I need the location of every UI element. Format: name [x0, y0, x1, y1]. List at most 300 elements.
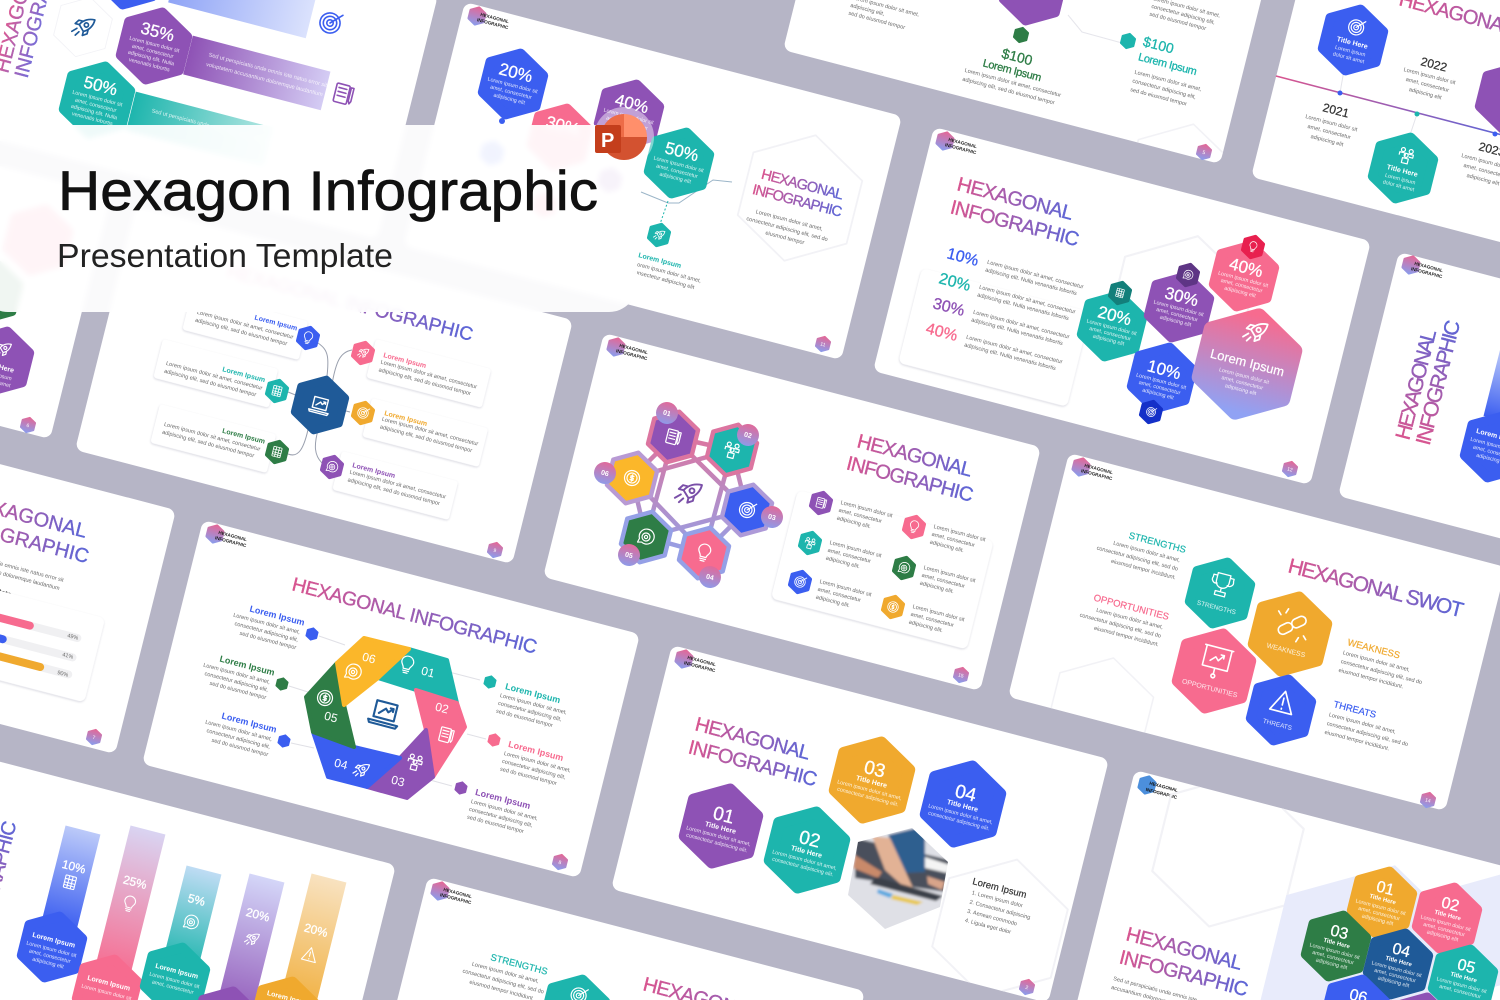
right label pink — [482, 733, 575, 790]
badge 02: 02 — [743, 432, 752, 440]
page number: 8 — [558, 860, 562, 866]
stat 30%: adipiscing elit. Nulla venenatis lobortis — [971, 317, 1064, 347]
page number: 9 — [493, 548, 497, 554]
logo: INFOGRAPHIC — [1145, 787, 1178, 800]
text: teal lorem ipsum: consectetur adipiscing elit — [631, 269, 695, 291]
hexagon: 40%: adipiscing elit — [1224, 285, 1257, 300]
value: green: Lorem ipsum dolor sit amet, consectetur — [964, 68, 1062, 99]
hexagon 05: 05 — [1456, 956, 1477, 977]
text: yellow: Lorem Ipsum — [384, 410, 428, 428]
logo — [607, 337, 651, 364]
text: strengths: eiusmod tempor incididunt. — [1110, 559, 1177, 581]
hexagon 01: 01 — [711, 803, 736, 829]
badge 01: 01 — [662, 410, 671, 418]
text: pink: Lorem Ipsum — [383, 352, 427, 370]
title: HEXAGONAL — [693, 714, 812, 765]
hexagon: 30%: amet, consectetur — [1156, 307, 1199, 324]
hexagon 01: 01 — [1375, 878, 1396, 899]
hexagon: threats — [1247, 673, 1315, 747]
faint hexagon with title: INFOGRAPHIC — [751, 182, 844, 221]
item: blue: amet, consectetur — [817, 587, 862, 604]
slide: top-left bands with percentages — [0, 0, 438, 239]
hexagon 02 — [1413, 881, 1481, 955]
list: Lorem Ipsum — [971, 876, 1028, 901]
logo: HEXAGONAL — [948, 137, 978, 149]
hexagon: teal title: dolor sit amet — [1382, 179, 1415, 194]
page number: 6 — [26, 423, 30, 429]
hexagon 01 — [1348, 865, 1416, 939]
hexagon 02: 02 — [1440, 894, 1461, 915]
hexagon: 35% — [117, 5, 191, 87]
hexagon: 40%: amet, consectetur — [605, 115, 648, 132]
page number — [815, 335, 831, 353]
slide: six steps around center — [75, 206, 573, 564]
step: purple — [320, 454, 344, 480]
hexagon 01 — [680, 781, 763, 871]
hexagon 03: 03 — [862, 757, 887, 783]
step: green — [265, 439, 289, 465]
stat 10%: 10% — [945, 245, 980, 270]
badge 06 — [592, 460, 618, 486]
page number: 14 — [1424, 797, 1431, 805]
right label pink: Lorem Ipsum — [507, 739, 564, 763]
page number — [953, 666, 969, 684]
bar: pink: 25% — [122, 872, 149, 892]
year 2022: Lorem ipsum dolor sit — [1403, 67, 1456, 87]
list: 4. Ligula eget dolor — [964, 918, 1012, 936]
item: teal: adipiscing elit. — [825, 556, 861, 570]
text: purple: Lorem Ipsum — [352, 462, 396, 480]
text: upper left: adipiscing elit, — [850, 3, 885, 18]
hexagon: 35%: adipiscing elit. Nulla — [127, 50, 175, 68]
title — [0, 488, 97, 568]
text: pink — [378, 352, 480, 398]
item: blue: adipiscing elit. — [815, 595, 851, 609]
right label teal: Lorem Ipsum — [504, 681, 561, 705]
faint hexagon — [932, 858, 1068, 992]
icon: PowerPoint — [594, 107, 654, 167]
big gradient hexagon: Lorem Ipsum — [1209, 346, 1286, 379]
title: INFOGRAPHIC — [844, 453, 975, 507]
right label purple — [449, 781, 542, 838]
hexagon: 50% — [645, 126, 713, 200]
dot 2 — [1414, 112, 1420, 116]
hexagon 01: Lorem ipsum dolor sit — [1355, 898, 1407, 917]
step: yellow — [351, 400, 375, 426]
hexagon 06 — [604, 447, 660, 509]
ring numbers: 06 — [361, 650, 377, 667]
text: upper left: sed do eiusmod tempor — [848, 11, 906, 31]
badge 04: 04 — [705, 574, 714, 582]
text: green: Lorem Ipsum — [221, 428, 266, 446]
hexagon: 10%: adipiscing elit — [1142, 387, 1175, 402]
hexagon 03: 03 — [1329, 922, 1350, 943]
hexagon 02: 02 — [797, 827, 822, 853]
badge 01 — [654, 400, 680, 426]
faint pink step icon — [533, 192, 557, 218]
hexagon 04: Title Here — [946, 799, 979, 814]
logo: HEXAGONAL — [1149, 781, 1179, 793]
card: blue — [182, 291, 308, 360]
page number — [86, 728, 102, 746]
faint hexagon with title: consectetur adipiscing elit, sed do — [746, 216, 828, 243]
purple band: Sed ut perspiciatis unde omnis iste natus error sit — [208, 52, 328, 89]
text: pink: Lorem ipsum dolor sit amet, consectetur — [380, 360, 478, 391]
text: threats: eiusmod tempor incididunt. — [1324, 730, 1390, 753]
text: yellow — [379, 410, 481, 455]
left label blue: Lorem ipsum dolor sit amet, — [232, 613, 301, 636]
item: pink: amet, consectetur — [931, 532, 976, 549]
left label blue 2: sed do eiusmod tempor — [211, 738, 269, 758]
item: pink: Lorem ipsum dolor sit — [933, 524, 986, 543]
hexagon: blue title: Lorem ipsum — [1334, 45, 1366, 59]
stat 10% — [945, 245, 1085, 298]
bar: blue: 10% — [60, 857, 87, 877]
hexagon: blue: Lorem ipsum dolor sit — [26, 940, 77, 959]
text: blue: adipiscing elit, sed do eiusmod tempor — [194, 318, 288, 347]
hexagon: 20%: amet, consectetur — [1089, 326, 1132, 343]
slide: dollar values — [784, 0, 1261, 162]
right label purple: consectetur adipiscing elit, — [468, 807, 534, 829]
ring numbers: 01 — [420, 664, 436, 681]
logo: INFOGRAPHIC — [616, 348, 648, 361]
text: upper right: consectetur adipiscing elit, — [1151, 4, 1216, 26]
card — [0, 555, 105, 702]
big gradient hexagon: adipiscing elit — [1224, 383, 1257, 397]
title — [844, 429, 981, 507]
hexagon: 20%: 20% — [497, 59, 535, 86]
left label green: consectetur adipiscing elit, — [204, 671, 269, 694]
title: HEXAGONAL SWOT — [1286, 555, 1466, 622]
slide: stats with hexagon cluster — [873, 127, 1371, 485]
item: purple: Lorem ipsum dolor sit — [840, 500, 893, 519]
text: pink: adipiscing elit, sed do eiusmod tempor — [378, 367, 471, 397]
icon: teal rocket hexagon — [647, 222, 671, 248]
text: strengths: Lorem ipsum dolor sit amet, — [471, 962, 540, 985]
hexagon 05: Lorem ipsum dolor sit — [1436, 976, 1488, 995]
vertical title: HEXAGONAL — [1392, 327, 1441, 442]
year 2021: 2021 — [1321, 100, 1351, 121]
hexagon: 35%: venenatis lobortis — [128, 57, 170, 74]
slide: numbered hexagons with photo — [611, 645, 1109, 1000]
item: purple: amet, consectetur — [838, 508, 883, 525]
year 2022: adipiscing elit — [1408, 87, 1442, 101]
bar: yellow — [275, 873, 346, 1000]
hexagon: 50% — [60, 59, 134, 141]
ring — [306, 638, 465, 798]
logo: HEXAGONAL — [443, 887, 473, 899]
banner title: Hexagon Infographic — [58, 159, 598, 222]
text: strengths — [1094, 523, 1187, 582]
right label purple: sed do eiusmod tempor — [466, 815, 524, 835]
text: strengths: STRENGTHS — [489, 952, 549, 978]
page number: 2 — [1025, 985, 1029, 991]
hexagon: opportunities: OPPORTUNITIES — [1181, 678, 1238, 700]
page number: 5 — [1202, 150, 1206, 156]
left label green: sed do eiusmod tempor — [209, 681, 267, 701]
title: HEXAGONAL INFOGRAPHIC — [225, 262, 475, 346]
badge 05 — [616, 542, 642, 568]
left label blue 2 — [201, 707, 292, 763]
hexagon: 30% — [528, 102, 592, 172]
stat 10%: adipiscing elit. Nulla venenatis lobortis — [985, 267, 1078, 297]
logo: HEXAGONAL — [218, 530, 248, 542]
logo — [431, 881, 475, 908]
text: threats — [1324, 699, 1414, 757]
logo — [1402, 255, 1446, 282]
card: pink — [366, 339, 491, 408]
icon: red — [1241, 234, 1265, 260]
item: yellow: Lorem ipsum dolor sit — [912, 604, 965, 623]
page number — [552, 853, 568, 871]
slide: vertical title right — [1338, 252, 1500, 610]
hexagon: blue: amet, consectetur — [28, 948, 71, 965]
text: blue — [194, 300, 298, 349]
hexagon: 50%: adipiscing elit. Nulla — [70, 104, 118, 122]
text: strengths: consectetur adipiscing elit, sed do — [1096, 546, 1178, 573]
item: yellow: amet, consectetur — [910, 612, 955, 629]
hexagon: 35%: 35% — [139, 18, 176, 45]
hexagon: pink — [73, 953, 141, 1000]
stat 40%: 40% — [924, 320, 959, 345]
stat 20% — [937, 270, 1077, 323]
title: INFOGRAPHIC — [948, 197, 1081, 251]
page number: 15 — [957, 672, 964, 680]
hexagon: 40% — [1210, 239, 1278, 313]
hexagon 03: amet, consectetur — [1312, 950, 1355, 966]
title: HEXAGONAL — [855, 431, 974, 482]
logo — [1138, 775, 1181, 802]
left label blue 2: Lorem ipsum dolor sit amet, — [204, 720, 273, 743]
page number — [1282, 460, 1298, 478]
page number — [20, 416, 36, 434]
title: HEXAGONAL — [1124, 924, 1244, 975]
hexagon: 40%: 40% — [1227, 254, 1265, 281]
hexagon: blue title — [1319, 3, 1387, 77]
hexagon: 20%: Lorem ipsum dolor sit — [487, 77, 539, 95]
bar tracks — [0, 588, 82, 679]
text: green: adipiscing elit, sed do eiusmod tempor — [161, 430, 255, 459]
hexagon 02 — [765, 804, 849, 896]
value: green: $100 — [1000, 45, 1034, 68]
item: teal: Lorem ipsum dolor sit — [829, 540, 882, 559]
text: teal lorem ipsum: Lorem Ipsum — [638, 252, 682, 270]
text: green: Lorem ipsum dolor sit amet, consectetur — [163, 422, 261, 453]
slide: hexagon ring — [142, 520, 640, 878]
right label purple: Lorem Ipsum — [474, 787, 531, 811]
hexagon: 50%: venenatis lobortis — [71, 111, 113, 128]
icon: PowerPoint: P — [601, 130, 614, 152]
title — [686, 713, 825, 791]
stat 20%: 20% — [937, 270, 972, 295]
teal dot and dashes — [660, 201, 668, 224]
faint hexagon — [1137, 124, 1223, 154]
left label blue: consectetur adipiscing elit, — [234, 621, 299, 644]
hexagon 06 — [1321, 973, 1389, 1000]
card: teal — [153, 339, 278, 408]
teal band: Sed ut perspiciatis unde omnis iste natus error sit — [151, 108, 271, 145]
photo hexagon — [848, 828, 948, 929]
hexagon: 50%: adipiscing elit — [659, 171, 692, 186]
logo: HEXAGONAL — [1414, 261, 1444, 273]
blue bar — [1484, 350, 1500, 426]
logo: HEXAGONAL — [687, 655, 717, 667]
slide: bottom SWOT partial — [367, 877, 865, 1000]
bar: purple: 20% — [244, 905, 271, 925]
item: green: Lorem ipsum dolor sit — [923, 565, 976, 584]
hexagon 05 — [1429, 943, 1497, 1000]
hexagon 04: 04 — [1391, 940, 1412, 961]
hexagon 02: amet, consectetur — [1423, 922, 1466, 938]
big gradient hexagon: Lorem ipsum dolor sit — [1218, 367, 1270, 386]
hexagon: 35%: amet, consectetur — [131, 43, 174, 60]
faint hexagon with title: eiusmod tempor — [765, 230, 805, 246]
logo: INFOGRAPHIC — [440, 892, 472, 905]
step: pink — [351, 340, 375, 366]
hexagon 03: Lorem ipsum dolor sit — [1309, 942, 1361, 961]
text: teal — [163, 352, 266, 400]
year 2022: 2022 — [1419, 54, 1449, 75]
hexagon 01: adipiscing elit — [1361, 913, 1394, 928]
hexagon 05 — [618, 506, 674, 568]
logo: INFOGRAPHIC — [1081, 468, 1113, 481]
text: opportunities: eiusmod tempor incididunt. — [1093, 626, 1160, 648]
hexagon: teal — [141, 941, 209, 1000]
list: 3. Aenean commodo — [966, 909, 1017, 927]
logo — [675, 649, 719, 676]
right label teal: sed do eiusmod tempor — [495, 709, 553, 729]
badge 06: 06 — [600, 470, 609, 478]
value: green: adipiscing elit, sed do eiusmod tempor — [962, 77, 1055, 106]
pale hexagon left — [1246, 840, 1490, 1000]
page number: 11 — [820, 341, 826, 349]
hexagon: 20%: adipiscing elit — [493, 92, 526, 107]
faint hexagon — [1050, 658, 1154, 733]
page number: 7 — [92, 735, 96, 741]
hexagon: 20%: 20% — [1096, 302, 1133, 329]
year 2021 — [1300, 97, 1363, 151]
value: teal: sed do eiusmod tempor — [1129, 87, 1188, 108]
hexagon 02: Lorem ipsum dolor sit amet, — [771, 849, 838, 872]
left label green — [199, 650, 290, 706]
faint hexagon with title: Lorem ipsum dolor sit amet, — [755, 209, 824, 233]
hexagon 03 — [719, 479, 775, 541]
segment 03 — [367, 730, 433, 798]
slide: SWOT — [1008, 453, 1500, 811]
logo — [1072, 457, 1116, 484]
hexagon: threats: THREATS — [1262, 718, 1293, 732]
text: strengths: Lorem ipsum dolor sit amet, — [1112, 541, 1181, 564]
title — [948, 173, 1087, 251]
text: teal: Lorem Ipsum — [222, 366, 266, 384]
text: opportunities: consectetur adipiscing elit, sed do — [1079, 613, 1161, 640]
hexagon: blue title: dolor sit amet — [1332, 51, 1365, 66]
hexagon: 10%: 10% — [1145, 356, 1183, 383]
text: teal: Lorem ipsum dolor sit amet, consectetur — [165, 361, 263, 392]
logo: HEXAGONAL — [480, 12, 510, 24]
hexagon: teal title: Lorem ipsum — [1384, 173, 1416, 187]
item: yellow: adipiscing elit. — [908, 620, 944, 634]
connectors — [288, 343, 352, 463]
text: purple: adipiscing elit, sed do eiusmod tempor — [347, 477, 440, 507]
purple band — [183, 36, 331, 110]
connector — [1068, 15, 1122, 43]
hexagon 04: adipiscing elit — [1377, 975, 1410, 990]
hexagon: 30%: 30% — [1163, 283, 1200, 310]
page number: 12 — [1286, 466, 1293, 474]
right label teal — [478, 675, 571, 732]
badge 02 — [735, 422, 761, 448]
hexagon: purple — [192, 984, 260, 1000]
year 2021: Lorem ipsum dolor sit — [1305, 114, 1358, 133]
title — [1117, 923, 1256, 1000]
logo: HEXAGONAL — [619, 343, 649, 355]
hexagon 04 — [676, 522, 732, 584]
left label blue: Lorem Ipsum — [249, 604, 306, 628]
stat 20%: Lorem ipsum dolor sit amet, consectetur — [978, 285, 1076, 316]
dot 3 — [1492, 132, 1498, 136]
big gradient hexagon — [1193, 305, 1301, 423]
banner subtitle: Presentation Template — [57, 237, 393, 274]
right label pink: Lorem ipsum dolor sit amet, — [503, 751, 572, 774]
value: teal — [1110, 28, 1212, 110]
icon: center rocket — [674, 479, 702, 507]
stat 30% — [931, 295, 1071, 348]
text: purple: Lorem ipsum dolor sit amet, consectetur — [349, 470, 447, 501]
hexagon: 35%: Lorem ipsum dolor sit — [129, 36, 180, 55]
hexagon: strengths: STRENGTHS — [1196, 600, 1237, 617]
hexagon 02: Title Here — [790, 845, 823, 860]
stat 40%: adipiscing elit. Nulla venenatis lobortis — [964, 342, 1057, 372]
connector line — [641, 180, 732, 203]
hexagon: 40% — [595, 78, 663, 152]
bar: purple — [213, 873, 284, 1000]
text: blue: Lorem ipsum dolor sit amet, consectetur — [196, 310, 294, 341]
logo: INFOGRAPHIC — [684, 660, 716, 673]
bar: yellow: 20% — [303, 920, 330, 940]
item: purple: adipiscing elit. — [836, 516, 872, 530]
hexagon: 10% — [1128, 341, 1196, 415]
hexagon: 50%: Lorem ipsum dolor sit — [72, 90, 123, 109]
ring numbers: 03 — [390, 773, 406, 790]
text: purple — [347, 462, 449, 508]
dot 1 — [1338, 90, 1342, 96]
logo: INFOGRAPHIC — [477, 17, 509, 30]
hexagon: purple title — [0, 325, 33, 397]
hexagon 04: Lorem ipsum dolor sit — [1371, 960, 1423, 979]
text: threats: Lorem ipsum dolor sit amet, — [1328, 712, 1397, 736]
page number — [1420, 791, 1436, 809]
item: pink — [902, 514, 987, 559]
text: opportunities — [1077, 590, 1170, 649]
text: weakness: consectetur adipiscing elit, sed do — [1340, 659, 1423, 686]
purple hexagon bottom — [1000, 0, 1066, 27]
item: green — [892, 555, 977, 600]
item: blue: Lorem ipsum dolor sit — [819, 579, 872, 598]
hexagon: teal: amet, consectetur — [151, 979, 194, 996]
right label pink: sed do eiusmod tempor — [499, 767, 557, 787]
other faint steps — [480, 140, 504, 166]
hexagon: strengths — [1186, 556, 1254, 630]
text: strengths: STRENGTHS — [1128, 530, 1187, 556]
text: weakness — [1338, 637, 1428, 695]
hexagon: 50%: amet, consectetur — [655, 163, 698, 180]
segment 01 — [378, 649, 457, 703]
icon: laptop — [367, 699, 402, 729]
hexagon: 40%: Lorem ipsum dolor sit — [603, 108, 655, 126]
hexagon: 30% — [1145, 270, 1213, 344]
hexagon: teal title — [1369, 131, 1437, 205]
